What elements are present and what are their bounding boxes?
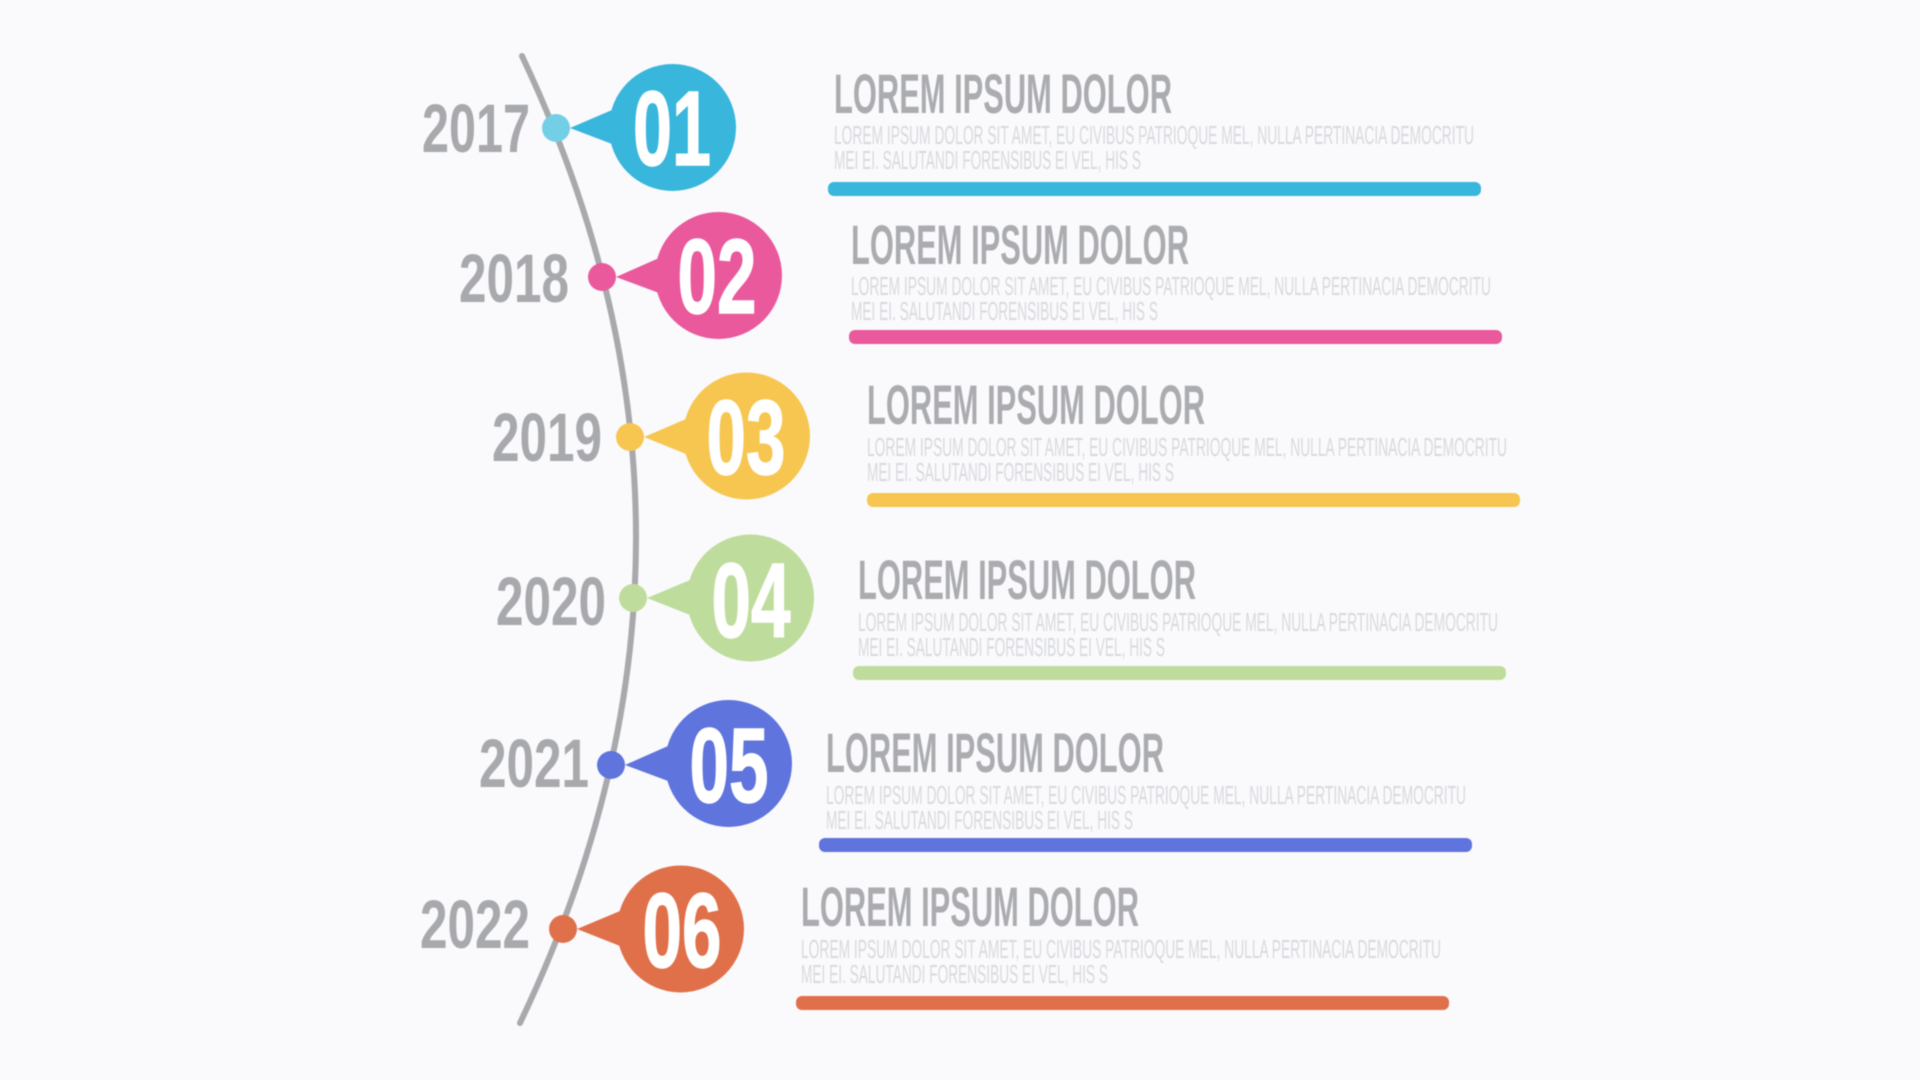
milestone 2020 [496, 534, 1506, 680]
number bubble 06 [577, 866, 744, 992]
year 2020: 2020 [496, 563, 606, 640]
body text 4 [858, 607, 1498, 662]
year 2017: 2017 [422, 90, 530, 167]
milestone 2022 [420, 866, 1449, 1010]
number bubble 05: 05 [690, 707, 768, 825]
number bubble 04 [647, 534, 814, 662]
number bubble 01: 01 [633, 70, 711, 188]
body text 3 [867, 432, 1507, 487]
body text 1 [834, 120, 1474, 175]
body text 5: MEI EI. SALUTANDI FORENSIBUS EI VEL, HIS S [826, 805, 1133, 835]
dot on axis 2022 [549, 915, 577, 943]
dot on axis 2020 [619, 584, 647, 612]
milestone 2018 [459, 212, 1502, 344]
number bubble 01 [570, 64, 736, 191]
colored bar 2 [849, 330, 1502, 344]
body text 4: MEI EI. SALUTANDI FORENSIBUS EI VEL, HIS S [858, 632, 1165, 662]
colored bar 3 [867, 493, 1520, 507]
body text 2: MEI EI. SALUTANDI FORENSIBUS EI VEL, HIS S [851, 296, 1158, 326]
colored bar 4 [853, 666, 1506, 680]
heading 5: LOREM IPSUM DOLOR [826, 721, 1164, 784]
year 2022: 2022 [420, 886, 530, 963]
colored bar 5 [819, 838, 1472, 852]
year 2019: 2019 [492, 399, 602, 476]
colored bar 1 [828, 182, 1481, 196]
number bubble 06: 06 [642, 872, 722, 990]
number bubble 03: 03 [706, 379, 786, 497]
milestone 2019 [492, 372, 1520, 507]
heading 1: LOREM IPSUM DOLOR [834, 62, 1172, 125]
colored bar 6 [796, 996, 1449, 1010]
body text 2 [851, 271, 1491, 326]
number bubble 03 [644, 372, 810, 500]
heading 3: LOREM IPSUM DOLOR [867, 373, 1205, 436]
number bubble 02: 02 [678, 218, 756, 336]
number bubble 04: 04 [712, 542, 791, 660]
body text 1: MEI EI. SALUTANDI FORENSIBUS EI VEL, HIS S [834, 145, 1141, 175]
milestone 2021 [479, 700, 1472, 852]
body text 5 [826, 780, 1466, 835]
number bubble 02 [616, 212, 782, 339]
dot on axis 2017 [542, 114, 570, 142]
year 2018: 2018 [459, 240, 569, 317]
body text 6: MEI EI. SALUTANDI FORENSIBUS EI VEL, HIS S [801, 959, 1108, 989]
dot on axis 2019 [616, 423, 644, 451]
heading 2: LOREM IPSUM DOLOR [851, 213, 1189, 276]
number bubble 05 [625, 700, 792, 827]
body text 3: MEI EI. SALUTANDI FORENSIBUS EI VEL, HIS S [867, 457, 1174, 487]
body text 6 [801, 934, 1441, 989]
heading 4: LOREM IPSUM DOLOR [858, 548, 1196, 611]
dot on axis 2018 [588, 263, 616, 291]
dot on axis 2021 [597, 751, 625, 779]
heading 6: LOREM IPSUM DOLOR [801, 875, 1139, 938]
milestone 2017 [422, 62, 1481, 196]
curved timeline axis [520, 56, 636, 1023]
year 2021: 2021 [479, 725, 589, 802]
